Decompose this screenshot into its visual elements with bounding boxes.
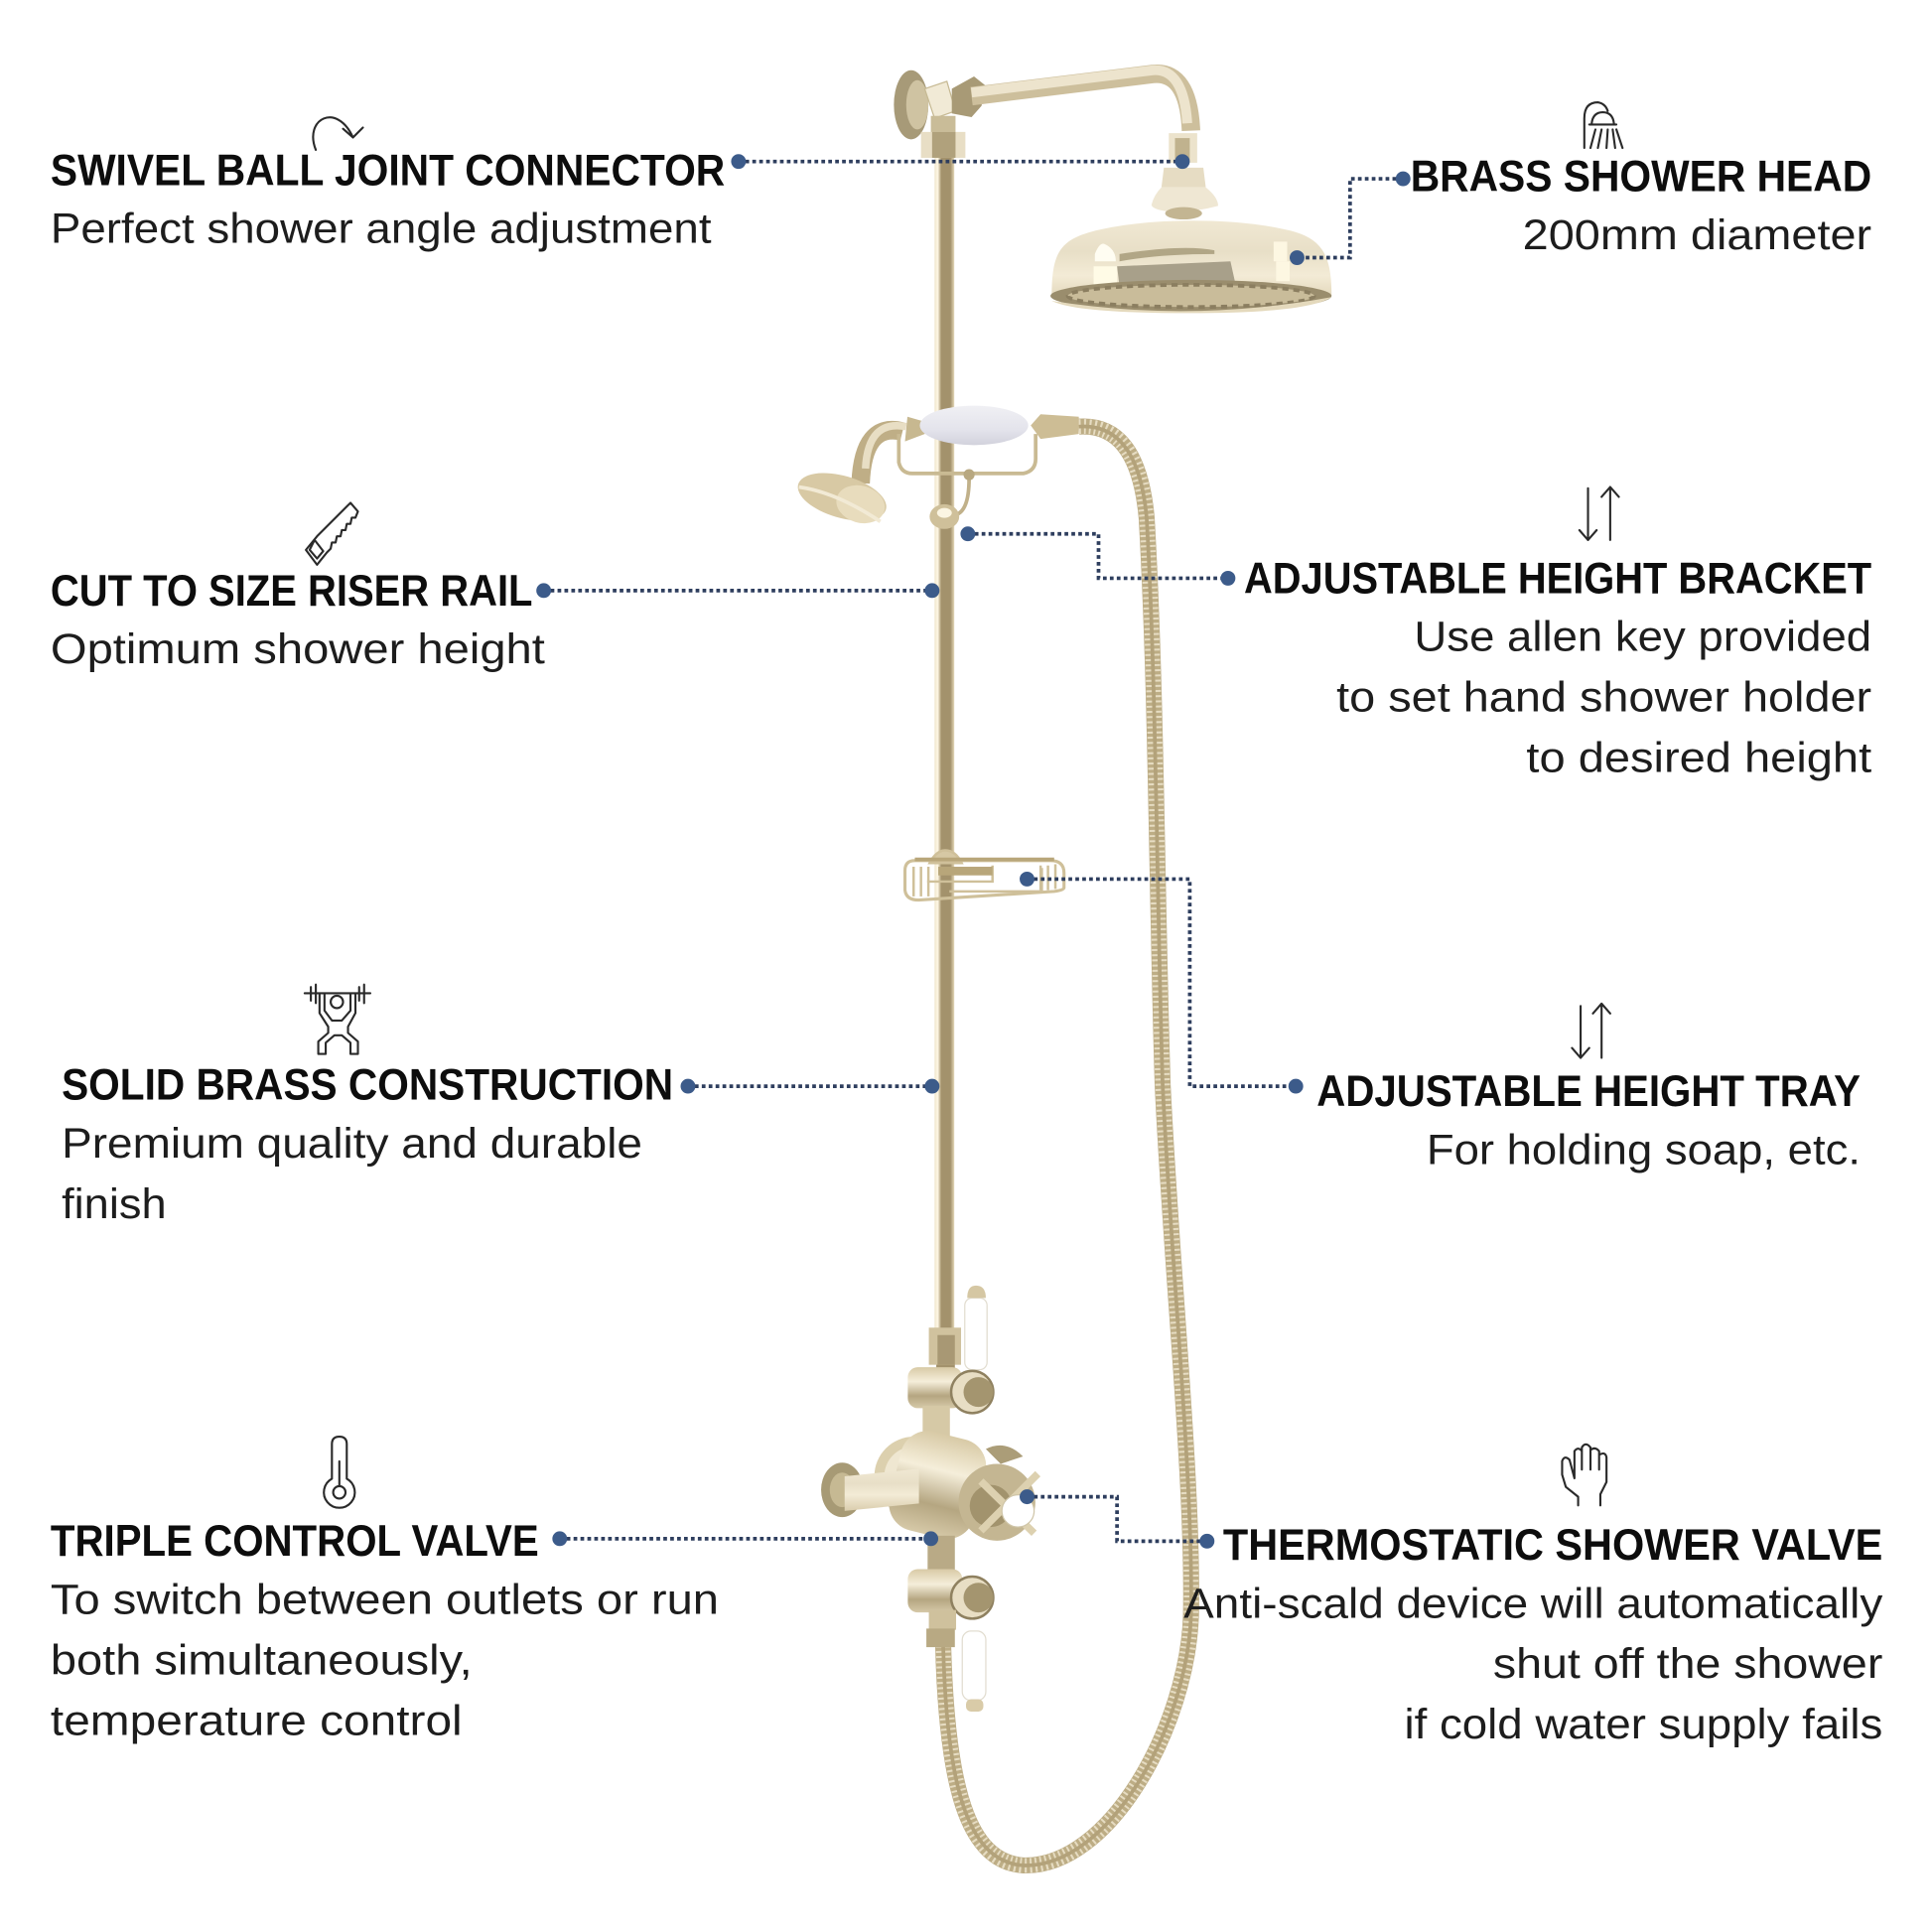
callout: adjustable height tray [1020,872,1861,1173]
callout: thermostatic shower valve: THERMOSTATIC SHOWER VALVE [1223,1521,1882,1570]
callout: adjustable height tray: For holding soap, etc. [1427,1126,1861,1173]
icon: saw [306,502,358,565]
callout: solid brass construction: finish [62,1180,167,1227]
callout: swivel ball joint connector [51,117,1189,252]
callout: adjustable height bracket: Use allen key provided [1414,614,1871,660]
icon: weightlifter [305,985,370,1054]
callout: adjustable height bracket: to set hand shower holder [1336,674,1871,721]
riser rail [934,154,954,1344]
callout: brass shower head [1290,102,1871,265]
icon: rotation arrow [313,117,362,150]
icon: up and down arrows [1572,1004,1610,1058]
callout: adjustable height bracket: to desired height [1526,734,1871,780]
callout: solid brass construction: Premium quality and durable [62,1120,642,1167]
hand shower [792,406,1079,529]
callout: triple control valve: To switch between outlets or run [51,1577,719,1623]
callout: brass shower head: BRASS SHOWER HEAD [1411,152,1871,201]
callout: cut to size riser rail: CUT TO SIZE RISER RAIL [51,567,532,616]
callout: triple control valve: temperature control [51,1697,463,1743]
callout: adjustable height bracket: ADJUSTABLE HEIGHT BRACKET [1244,554,1871,603]
soap tray [905,851,1064,900]
callout: solid brass construction: SOLID BRASS CONSTRUCTION [62,1061,673,1110]
callout: swivel ball joint connector: SWIVEL BALL JOINT CONNECTOR [51,146,725,195]
shower system product illustration [792,70,1331,1865]
callout: cut to size riser rail [51,502,939,672]
callout: thermostatic shower valve: Anti-scald device will automatically [1183,1580,1883,1626]
icon: shower [1585,102,1622,148]
callout: brass shower head: 200mm diameter [1523,211,1871,258]
callout: triple control valve: TRIPLE CONTROL VALVE [51,1517,539,1566]
icon: hand [1562,1445,1606,1505]
callout: solid brass construction [62,985,939,1227]
wall bracket and swivel joint [894,70,986,158]
thermostatic valve [821,1286,1037,1712]
callout: cut to size riser rail: Optimum shower height [51,625,545,672]
callout: triple control valve: both simultaneously, [51,1636,473,1683]
shower arm [972,70,1191,131]
callout: adjustable height tray: ADJUSTABLE HEIGHT TRAY [1316,1067,1861,1116]
icon: up and down arrows [1580,487,1619,540]
flexible hose [943,427,1191,1865]
callout: swivel ball joint connector: Perfect shower angle adjustment [51,206,712,252]
icon: thermometer [324,1437,354,1508]
callout: triple control valve [51,1437,938,1743]
callout: thermostatic shower valve [1020,1445,1883,1747]
callout: adjustable height bracket [960,487,1871,780]
callout: thermostatic shower valve: shut off the shower [1493,1640,1882,1687]
shower head [1050,133,1331,313]
callout: thermostatic shower valve: if cold water supply fails [1404,1701,1882,1747]
